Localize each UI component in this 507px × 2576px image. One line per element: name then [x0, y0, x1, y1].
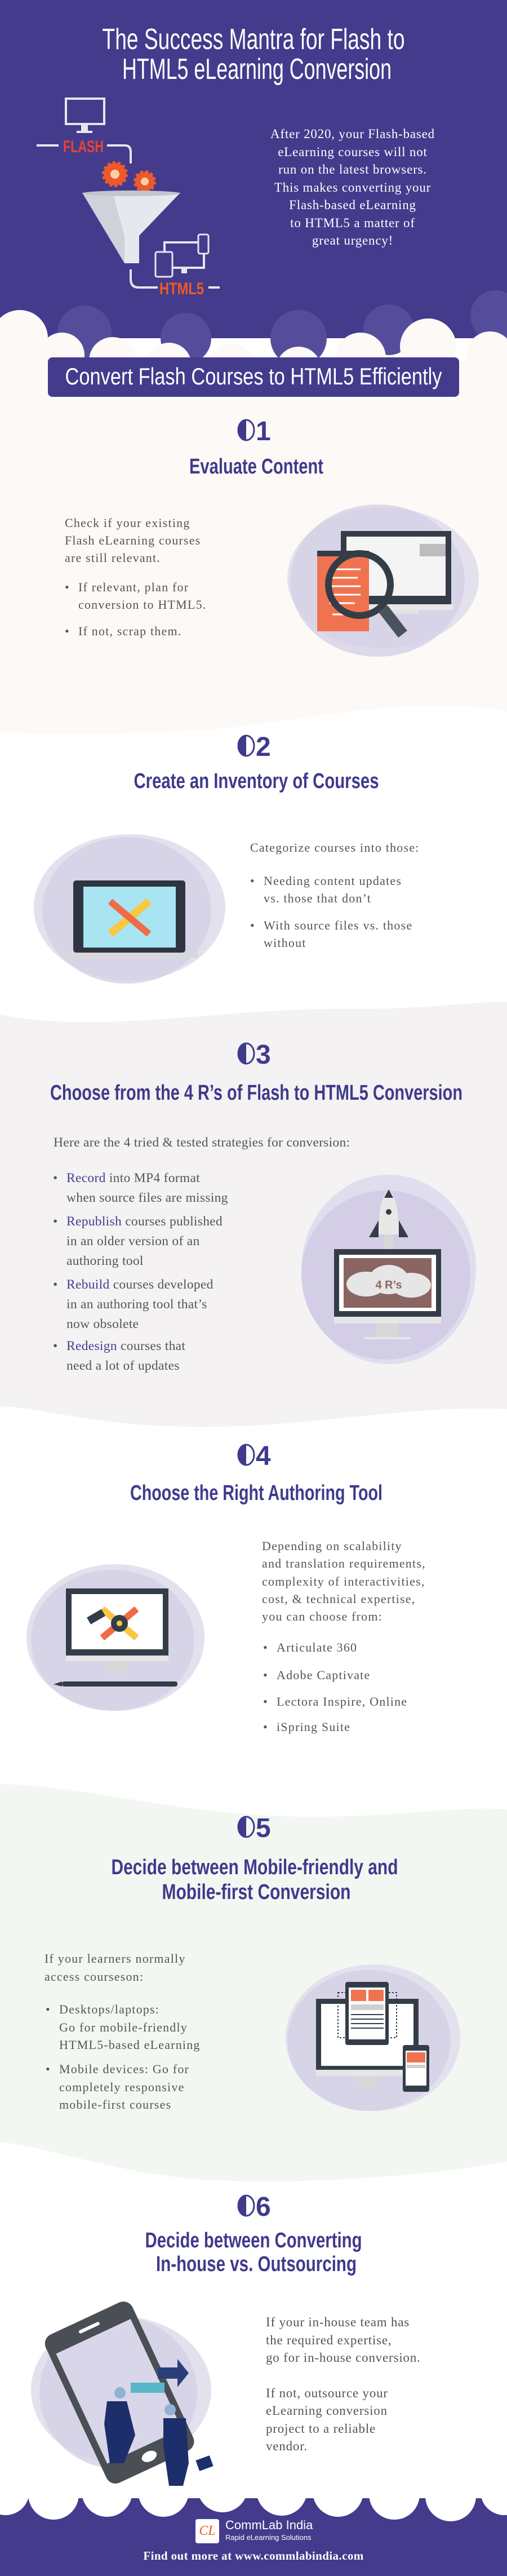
text: • — [65, 580, 70, 594]
text: authoring tool: complexity of interactivities, — [262, 1574, 425, 1588]
text: authoring tool: cost, & technical expertise, — [262, 1592, 415, 1606]
number 02 — [238, 734, 271, 759]
footer — [143, 2518, 364, 2562]
text: evaluate content — [65, 516, 206, 638]
text: Record into MP4 format — [66, 1171, 200, 1185]
heading: in-house vs outsourcing: Decide between Converting — [145, 2229, 362, 2252]
text: mobile: access courseson: — [45, 1969, 144, 1983]
text: Needing content updates — [264, 874, 402, 888]
text: when source files are missing — [66, 1190, 228, 1205]
text: Desktops/laptops: — [59, 2002, 159, 2016]
text: in-house vs outsourcing: the required expertise, — [266, 2332, 392, 2347]
text: in-house vs outsourcing: eLearning conversion — [266, 2404, 388, 2418]
text: • — [263, 1668, 268, 1682]
logo: CommLab India — [195, 2518, 313, 2543]
heading: authoring tool: Choose the Right Authoring Tool — [130, 1481, 383, 1505]
text: • — [46, 2002, 51, 2016]
logo: CommLab India: CL — [199, 2524, 216, 2538]
text: • — [250, 918, 255, 932]
logo: CommLab India: Rapid eLearning Solutions — [225, 2533, 311, 2542]
intro text: to HTML5 a matter of — [290, 215, 415, 230]
heading: mobile: Decide between Mobile-friendly and — [112, 1856, 398, 1879]
text: • — [263, 1720, 268, 1734]
text: • — [53, 1339, 58, 1353]
text: now obsolete — [66, 1317, 139, 1331]
text: Republish courses published — [66, 1214, 223, 1229]
logo: CommLab India: CommLab India — [225, 2518, 313, 2532]
title — [103, 23, 404, 86]
icon: phone handshake — [31, 2301, 214, 2486]
number 01 — [238, 418, 271, 443]
text: Go for mobile-friendly — [59, 2020, 188, 2034]
text: • — [53, 1214, 58, 1229]
text: authoring tool: you can choose from: — [262, 1609, 383, 1623]
number 05 — [238, 1815, 271, 1840]
heading: in-house vs outsourcing — [145, 2229, 362, 2276]
number 03 — [238, 1042, 271, 1066]
text: in-house vs outsourcing — [266, 2315, 421, 2453]
text: authoring tool — [262, 1539, 426, 1734]
text: Articulate 360 — [277, 1640, 357, 1654]
text: in an authoring tool that’s — [66, 1297, 207, 1312]
text: Adobe Captivate — [277, 1668, 370, 1682]
intro text: great urgency! — [312, 233, 393, 247]
text: in-house vs outsourcing: vendor. — [266, 2439, 308, 2453]
text: Lectora Inspire, Online — [277, 1694, 407, 1709]
icon: rocket launch from monitor — [301, 1175, 476, 1364]
text: • — [65, 624, 70, 638]
text: Mobile devices: Go for — [59, 2062, 189, 2076]
text: If not, scrap them. — [78, 624, 181, 638]
icon: rocket launch from monitor: 4 R’s — [375, 1279, 402, 1291]
text: in-house vs outsourcing: If your in-house team has — [266, 2315, 410, 2329]
text: need a lot of updates — [66, 1358, 180, 1373]
text: inventory: Categorize courses into those: — [250, 840, 420, 855]
text: With source files vs. those — [264, 918, 412, 932]
text: • — [46, 2062, 51, 2076]
icon: flash to html5 funnel: FLASH — [63, 138, 104, 156]
text: HTML5-based eLearning — [59, 2038, 201, 2052]
banner — [48, 357, 459, 397]
text: evaluate content: Flash eLearning courses — [65, 533, 201, 547]
icon: flash to html5 funnel: HTML5 — [159, 280, 204, 298]
text: conversion to HTML5. — [78, 597, 206, 612]
text: mobile — [45, 1951, 201, 2112]
icon: magnifier on monitor — [287, 504, 479, 657]
text: authoring tool: and translation requirements, — [262, 1556, 426, 1570]
heading: mobile: Mobile-first Conversion — [162, 1880, 350, 1904]
text: completely responsive — [59, 2080, 185, 2093]
text: • — [53, 1277, 58, 1292]
text: in-house vs outsourcing: If not, outsource your — [266, 2385, 388, 2400]
text: Rebuild courses developed — [66, 1277, 214, 1292]
intro text: eLearning courses will not — [278, 144, 428, 159]
text: Redesign courses that — [66, 1339, 185, 1353]
text: without — [264, 936, 306, 950]
heading: evaluate content: Evaluate Content — [189, 455, 323, 479]
text: • — [263, 1694, 268, 1709]
text: in an older version of an — [66, 1234, 200, 1249]
text: If relevant, plan for — [78, 580, 189, 594]
text: evaluate content: are still relevant. — [65, 551, 161, 565]
icon: responsive devices — [286, 1964, 460, 2111]
text: inventory — [250, 840, 420, 950]
title: HTML5 eLearning Conversion — [122, 53, 392, 86]
text: 4 Rs strategies: Here are the 4 tried & tested strategies for conversion: — [54, 1135, 350, 1150]
heading: in-house vs outsourcing: In-house vs. Outsourcing — [156, 2252, 357, 2276]
intro text: run on the latest browsers. — [278, 162, 427, 176]
icon: laptop with pencil and ruler — [34, 834, 225, 984]
text: authoring tool: Depending on scalability — [262, 1539, 402, 1553]
heading: inventory: Create an Inventory of Courses — [134, 769, 379, 793]
intro text: Flash-based eLearning — [289, 198, 416, 212]
text: 4 Rs strategies — [53, 1135, 350, 1373]
heading: mobile — [112, 1856, 398, 1904]
intro text — [270, 127, 435, 247]
intro text: After 2020, your Flash-based — [270, 127, 435, 141]
number 06 — [238, 2194, 271, 2219]
text: in-house vs outsourcing: project to a reliable — [266, 2422, 376, 2435]
icon: flash to html5 funnel — [37, 98, 220, 298]
text: • — [53, 1171, 58, 1185]
footer link text: Find out more at www.commlabindia.com — [143, 2549, 364, 2562]
text: iSpring Suite — [277, 1720, 350, 1734]
text: authoring tool — [66, 1254, 144, 1268]
text: mobile-first courses — [59, 2097, 171, 2112]
text: • — [263, 1640, 268, 1654]
text: vs. those that don’t — [264, 891, 371, 905]
text: in-house vs outsourcing: go for in-house conversion. — [266, 2351, 421, 2365]
text: mobile: If your learners normally — [45, 1951, 186, 1966]
text: • — [250, 874, 255, 888]
number 04 — [238, 1443, 271, 1468]
icon: monitor with tools — [26, 1564, 204, 1711]
intro text: This makes converting your — [274, 180, 431, 194]
text: evaluate content: Check if your existing — [65, 516, 190, 530]
